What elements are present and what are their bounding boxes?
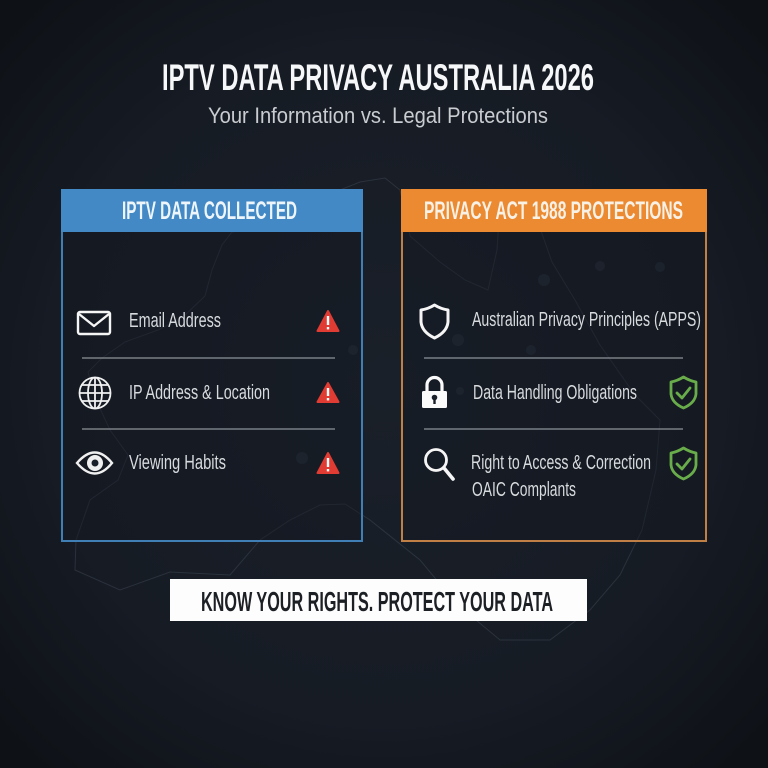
label: right to access and correction: Right to Access & Correction bbox=[471, 452, 651, 474]
icon: lock bbox=[422, 378, 447, 408]
icon: green check shield bbox=[671, 377, 696, 408]
icon: warning bbox=[318, 453, 338, 473]
label: email address: Email Address bbox=[129, 310, 221, 332]
panel header bbox=[61, 189, 363, 232]
icon: magnifying glass bbox=[426, 450, 453, 479]
icon: eye bbox=[77, 452, 112, 474]
panel heading: IPTV DATA COLLECTED bbox=[122, 197, 297, 225]
panel: IPTV data collected bbox=[61, 189, 363, 541]
label: IP address and location: IP Address & Location bbox=[129, 382, 270, 404]
panel header bbox=[401, 189, 707, 232]
call to action banner bbox=[170, 579, 587, 621]
background map of Australia bbox=[75, 178, 660, 640]
subtitle: Your Information vs. Legal Protections bbox=[208, 103, 548, 128]
icon: shield bbox=[421, 305, 448, 338]
label: OAIC complaints: OAIC Complants bbox=[472, 479, 576, 501]
icon: envelope bbox=[78, 312, 110, 334]
icon: warning bbox=[318, 383, 338, 402]
icon: warning bbox=[318, 311, 338, 331]
background network nodes bbox=[296, 261, 665, 464]
icon: green check shield bbox=[671, 448, 696, 479]
panel outline bbox=[62, 190, 362, 541]
panel outline bbox=[402, 190, 706, 541]
label: data handling obligations: Data Handling Obligations bbox=[473, 382, 637, 404]
panel: Privacy Act 1988 protections bbox=[401, 189, 707, 541]
label: viewing habits: Viewing Habits bbox=[129, 452, 226, 474]
icon: globe bbox=[80, 378, 110, 408]
